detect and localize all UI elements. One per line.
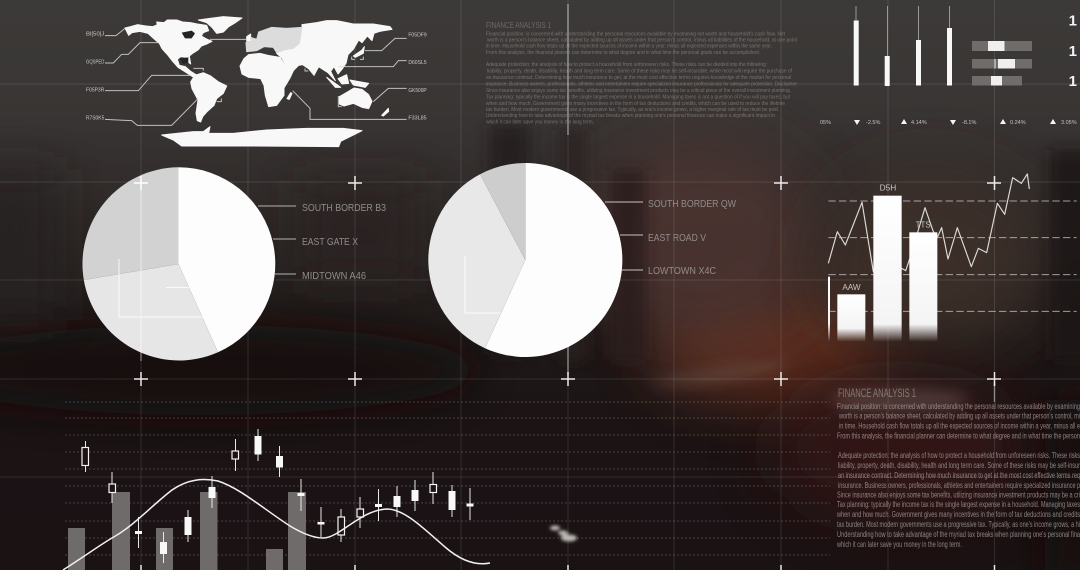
ticker up 0.24%: 0.24% xyxy=(1010,120,1026,126)
right edge numerals: 1 xyxy=(1069,73,1077,90)
world map with callouts xyxy=(86,17,427,147)
right edge numerals: 1 xyxy=(1069,43,1077,60)
text block: finance analysis, top centre: Understanding how to take advantage of the myriad tax breaks when planning one's personal finances can make a significant impact in xyxy=(486,113,775,119)
text block: finance analysis, top centre: an insurance contract. Determining how much insurance to get, at the most cost effective terms requires knowledge of the market for personal xyxy=(486,75,791,81)
text block: finance analysis, top centre: From this analysis, the financial planner can determine to what degree and in what time the personal goals can be accomplished. xyxy=(486,50,760,56)
percentage ticker row: 05% xyxy=(820,120,831,126)
hollow candles xyxy=(82,448,436,535)
text block: finance analysis, top centre: insurance. Business owners, professionals, athletes and entertainers require specialized insurance professionals for adequate protection. Disclaimer: xyxy=(486,82,798,88)
map landmasses xyxy=(125,17,392,147)
text block: finance analysis, top centre: when and how much. Government gives many incentives in the form of tax deductions and credits, which can be used to reduce the lifetime xyxy=(485,101,785,107)
callout labels: F33L85 xyxy=(408,116,427,122)
text block: finance analysis, top centre: Adequate protection: the analysis of how to protect a household from unforeseen risks. These risks can be divided into the following: xyxy=(486,62,767,68)
text block: finance analysis, top centre: in time. Household cash flow totals up all the expected sources of income within a year, minus all expected expenses within the same year. xyxy=(486,44,772,50)
callout labels: F05DF9 xyxy=(408,32,427,38)
text block: finance analysis, bottom right xyxy=(836,386,1080,549)
trend line xyxy=(828,174,1029,278)
heading: finance analysis: FINANCE ANALYSIS 1 xyxy=(486,21,551,30)
text block: finance analysis, top centre: worth is a person's balance sheet, calculated by adding up all assets under that person's control, minus all liabilities of the household, at one point xyxy=(486,38,797,44)
filled candles xyxy=(135,436,474,554)
ticker up 0.24% xyxy=(1000,119,1026,126)
candlestick chart, bottom left xyxy=(63,402,830,570)
pie labels left xyxy=(258,202,386,282)
axis line xyxy=(828,277,830,342)
bar TTS xyxy=(909,232,937,342)
ticker up 3.05%: 3.05% xyxy=(1061,120,1077,126)
callout labels: R7S0K5 xyxy=(86,116,104,122)
highlighted region: Europe xyxy=(246,27,302,53)
ticker up 4.14%: 4.14% xyxy=(911,120,927,126)
heading: finance analysis: FINANCE ANALYSIS 1 xyxy=(838,386,916,400)
pie labels left: SOUTH BORDER B3 xyxy=(302,202,386,214)
combo chart: bars with line, right xyxy=(828,174,1077,342)
callout labels: GK500P xyxy=(408,88,427,94)
bar labels: D5H xyxy=(880,182,896,192)
text block: finance analysis, top centre: tax burden. Most modern governments use a progressive tax. Typically, as one's income grows, a higher marginal rate of tax must be paid. xyxy=(486,107,779,113)
pie labels right xyxy=(605,198,736,277)
right edge numerals xyxy=(1069,12,1077,90)
pie labels right: LOWTOWN X4C xyxy=(648,265,716,277)
callout labels: GQSPED xyxy=(86,60,104,66)
top right range bars xyxy=(972,41,1032,86)
pie labels left: EAST GATE X xyxy=(302,236,358,248)
ticker down -2.5% xyxy=(854,120,880,126)
ticker up 4.14% xyxy=(901,119,927,126)
callout lines xyxy=(105,28,407,125)
text block: finance analysis, top centre: which it can later save you money in the long term. xyxy=(485,120,594,126)
map inland seas xyxy=(180,31,195,64)
sine trend line xyxy=(63,480,490,570)
right edge numerals: 1 xyxy=(1069,12,1077,30)
bar labels xyxy=(842,182,931,292)
callout labels: BI[50]J xyxy=(86,32,105,38)
ticker down -2.5%: -2.5% xyxy=(866,120,880,126)
percentage ticker row xyxy=(820,119,1077,126)
top right candle bars xyxy=(854,6,952,86)
dotted gridlines xyxy=(65,402,830,555)
text block: finance analysis, top centre xyxy=(485,21,798,126)
volume bars xyxy=(68,492,306,570)
text block: finance analysis, top centre: Since insurance also enjoys some tax benefits, utilizing insurance investment products may be a critical piece of the overall investment planning. xyxy=(486,88,791,94)
crosshair markers xyxy=(134,176,1001,570)
pie chart: south border, east gate, midtown xyxy=(82,167,275,361)
blurred glint xyxy=(550,526,577,542)
text block: finance analysis, bottom right: which it can later save you money in the long term. xyxy=(836,540,962,549)
ticker down -8.1% xyxy=(950,120,976,126)
callout labels: D60SL5 xyxy=(408,60,427,66)
text block: finance analysis, top centre: Tax planning: typically the income tax is the single largest expense in a household. Managing taxes is not a question of if you will pay taxes, but xyxy=(486,94,790,100)
bar labels: AAW xyxy=(842,282,861,292)
candle wicks xyxy=(86,429,470,563)
text block: finance analysis, top centre: Financial position: is concerned with understanding the personal resources available by examining net worth and household's cash flow. Net xyxy=(486,32,785,38)
bar labels: TTS xyxy=(916,220,931,230)
pie labels right: EAST ROAD V xyxy=(648,232,706,244)
dashed gridlines xyxy=(828,201,1077,311)
callout labels: F05P3R xyxy=(86,88,104,94)
pie labels right: SOUTH BORDER QW xyxy=(648,198,736,210)
pie chart: south border, east road, lowtown xyxy=(428,163,622,357)
ticker up 3.05% xyxy=(1050,119,1077,126)
bar AAW xyxy=(837,294,865,342)
text block: finance analysis, top centre: liability, property, death, disability, health and long term care. Some of these risks may be self-insurable, while most will require the purchase of xyxy=(487,68,792,74)
ticker down -8.1%: -8.1% xyxy=(962,120,976,126)
bar D5H xyxy=(873,196,902,342)
pie labels left: MIDTOWN A46 xyxy=(302,270,366,282)
callout labels xyxy=(86,32,427,122)
